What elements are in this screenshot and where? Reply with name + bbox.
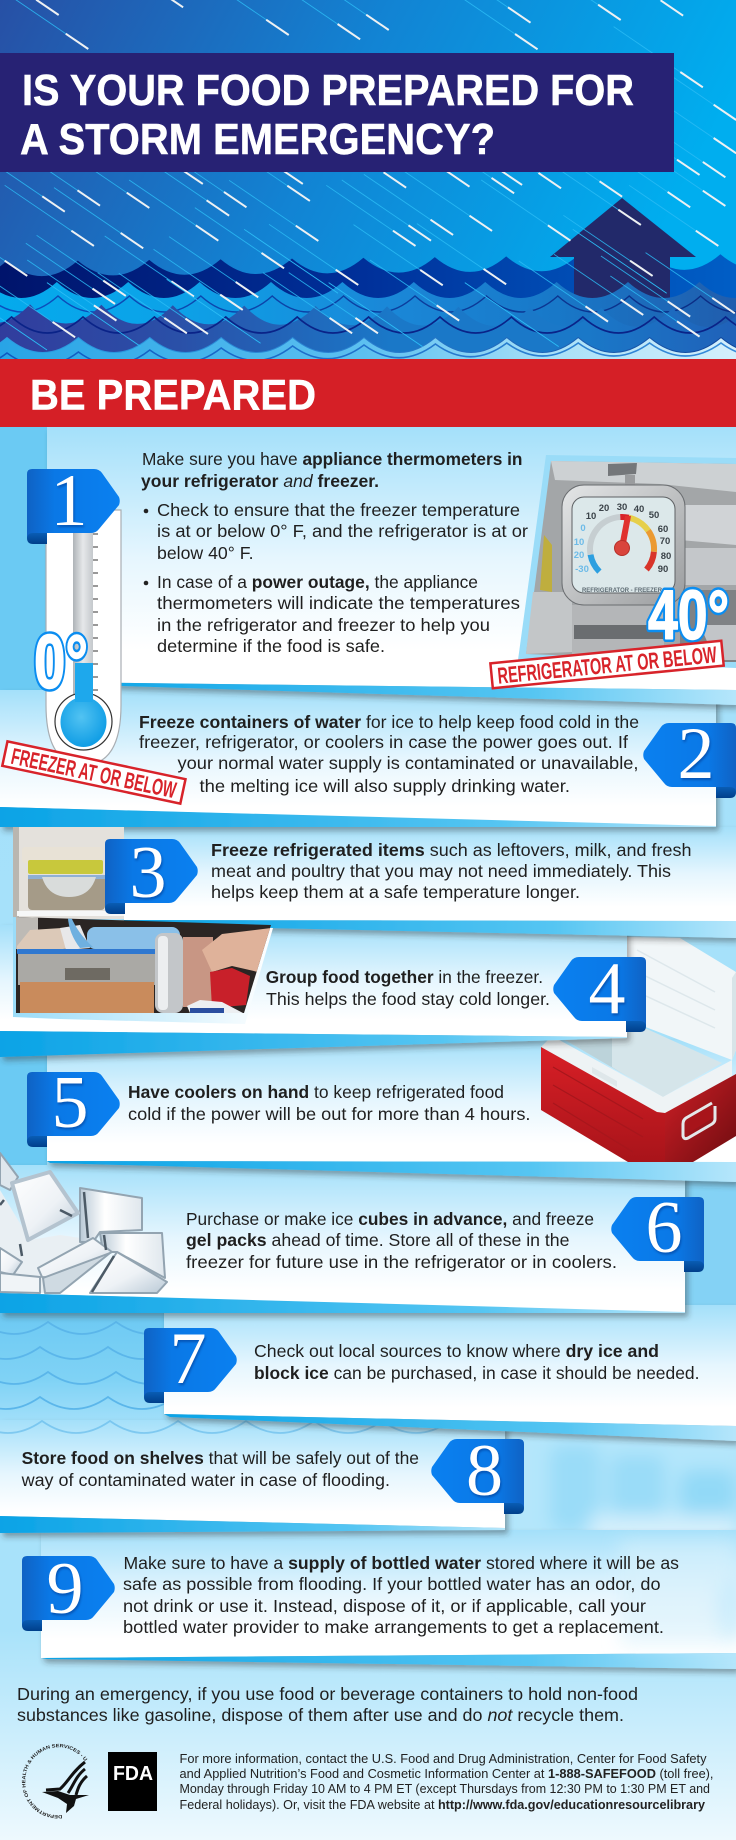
badge 9: 9 [46, 1548, 84, 1630]
lower left background strip [0, 1040, 47, 1170]
photo: ice cubes [0, 1153, 167, 1293]
panel: step 6 [0, 1165, 685, 1313]
upper freezer shelf [13, 827, 124, 919]
header storm scene [0, 0, 736, 380]
zero degrees label: 0° [34, 620, 88, 705]
panel 6 background [0, 1165, 685, 1313]
dial numbers: 0 [580, 523, 586, 534]
badge 3: 3 [130, 832, 166, 914]
step 8 text [21, 1448, 419, 1490]
dial numbers: 20 [574, 550, 584, 561]
dial numbers: 40 [634, 504, 644, 515]
dial numbers: 20 [599, 503, 609, 514]
first bullet: below 40° F. [157, 543, 254, 563]
cooler handle [690, 1105, 713, 1132]
second bullet [144, 572, 520, 656]
step 4 text: This helps the food stay cold longer. [266, 989, 550, 1009]
dark wave outline row [0, 317, 736, 333]
panel 5 background [47, 1040, 736, 1182]
contact information: and Applied Nutrition’s Food and Cosmetic Information Center at 1-888-SAFEFOOD (toll free), [180, 1766, 714, 1781]
panel 9 background [41, 1530, 736, 1669]
photo frame [518, 455, 736, 668]
second bullet: in the refrigerator and freezer to help you [157, 615, 490, 635]
badge 1: 1 [50, 460, 88, 542]
title text: IS YOUR FOOD PREPARED FOR [22, 66, 634, 115]
panel: step 7 [164, 1305, 736, 1441]
dial needle [619, 516, 631, 549]
step 5 text [128, 1082, 530, 1124]
blurred bottled water photo [505, 1425, 736, 1660]
title banner [0, 53, 674, 172]
badge 5: 5 [52, 1062, 88, 1144]
step 8 text: way of contaminated water in case of flooding. [21, 1470, 390, 1490]
panel: step 3 [124, 827, 736, 938]
red section banner [0, 359, 736, 427]
back wave row [0, 254, 736, 359]
panel 4 background [0, 925, 627, 1057]
badge 6 [611, 1187, 704, 1272]
step 5 text: Have coolers on hand to keep refrigerated food [128, 1082, 504, 1102]
water wave lines [0, 1322, 450, 1433]
bottle overlay [620, 1540, 736, 1645]
emergency note: substances like gasoline, dispose of them after use and do not recycle them. [17, 1705, 624, 1725]
second bullet: determine if the food is safe. [157, 636, 385, 656]
panel 8 background [0, 1420, 505, 1533]
badge 2 [643, 713, 736, 798]
first bullet: is at or below 0° F, and the refrigerator is at or [157, 521, 528, 541]
step 2 text: your normal water supply is contaminated or unavailable, [178, 753, 638, 773]
rain streaks [0, 0, 736, 350]
dial numbers: 90 [658, 564, 668, 575]
stamp: freezer at or below [2, 741, 186, 805]
contact information [180, 1751, 714, 1812]
step 1 intro text: your refrigerator and freezer. [141, 471, 379, 491]
step 4 text [266, 967, 550, 1009]
panel: step 8 [0, 1420, 505, 1533]
wave water background [0, 1310, 170, 1425]
step 7 text [254, 1341, 700, 1383]
dial numbers [574, 502, 671, 594]
contact information: Federal holidays). Or, visit the FDA website at http://www.fda.gov/educationresourcelibrary [180, 1797, 706, 1812]
cooler rim [541, 1036, 732, 1113]
dial numbers: 70 [660, 536, 670, 547]
step 2 text [139, 712, 639, 796]
thermometer tube [73, 530, 93, 698]
second bullet: thermometers will indicate the temperatures [157, 593, 520, 613]
panel 2 background [0, 690, 716, 827]
badge 2: 2 [678, 713, 714, 795]
front wave outline [0, 343, 736, 367]
illustration: red cooler [541, 937, 736, 1162]
step 3 text: Freeze refrigerated items such as leftovers, milk, and fresh [211, 840, 692, 860]
step 3 text: meat and poultry that you may not need immediately. This [211, 861, 671, 881]
dial numbers: 30 [617, 502, 627, 513]
badge 7 [144, 1318, 237, 1403]
logo: FDA [108, 1752, 157, 1811]
badge 3 [105, 832, 198, 914]
second wave row [0, 282, 736, 359]
emergency note: During an emergency, if you use food or beverage containers to hold non-food [17, 1684, 638, 1704]
logo: HHS seal: DEPARTMENT OF HEALTH & HUMAN SERVICES - USA [22, 1744, 88, 1818]
icon: flooded house arrow [550, 198, 696, 305]
dial scale arcs [590, 517, 654, 572]
dial numbers: -30 [575, 564, 589, 575]
dial numbers: 10 [574, 537, 584, 548]
badge 7: 7 [170, 1318, 206, 1400]
badge 4 [553, 948, 646, 1032]
dial numbers: 80 [661, 551, 671, 562]
step 6 text: freezer for future use in the refrigerator or in coolers. [186, 1252, 617, 1272]
cooler interior [560, 1020, 722, 1097]
step 9 text: bottled water provider to make arrangements to get a replacement. [123, 1617, 664, 1637]
logo: HHS seal [22, 1744, 89, 1818]
zero degrees label: 0° [34, 620, 88, 705]
second bullet: In case of a power outage, the appliance [157, 572, 478, 592]
badge 5 [27, 1062, 120, 1147]
front wave row [0, 338, 736, 380]
section page background [0, 427, 736, 1840]
step 2 text: Freeze containers of water for ice to help keep food cold in the [139, 712, 639, 732]
cooler lid [627, 937, 736, 1060]
step 9 text: not drink or use it. Instead, dispose of it, or if applicable, call your [123, 1596, 646, 1616]
step 7 text: block ice can be purchased, in case it should be needed. [254, 1363, 700, 1383]
stamp: freezer at or below: FREEZER AT OR BELOW [9, 743, 179, 803]
step 2 text: the melting ice will also supply drinking water. [200, 776, 570, 796]
badge 6: 6 [646, 1187, 682, 1269]
lower freezer compartment [13, 908, 273, 1024]
step 6 text [186, 1209, 617, 1272]
dial body [562, 485, 685, 605]
badge 8: 8 [466, 1430, 503, 1512]
panel 1 background [47, 427, 736, 705]
dial numbers: REFRIGERATOR - FREEZER [582, 588, 663, 594]
step 6 text: gel packs ahead of time. Store all of these in the [186, 1230, 570, 1250]
first bullet: Check to ensure that the freezer temperature [157, 500, 520, 520]
left background strip [0, 427, 47, 827]
red section banner: BE PREPARED [30, 372, 316, 420]
contact information: Monday through Friday 10 AM to 4 PM ET (except Thursdays from 12:30 PM to 1:30 PM ET and [180, 1781, 710, 1796]
title text: A STORM EMERGENCY? [20, 115, 495, 164]
sky background [0, 0, 736, 359]
step 5 text: cold if the power will be out for more than 4 hours. [128, 1104, 530, 1124]
step 2 text: freezer, refrigerator, or coolers in case the power goes out. If [139, 732, 628, 752]
step 9 text [123, 1553, 679, 1637]
thermometer bulb [55, 693, 112, 750]
step 3 text [211, 840, 692, 902]
thermometer body [46, 510, 121, 765]
step 8 text: Store food on shelves that will be safely out of the [22, 1448, 419, 1468]
logo: FDA: FDA [113, 1763, 153, 1785]
photo: refrigerator thermometer [518, 455, 736, 668]
emergency note [17, 1684, 638, 1725]
third wave row [0, 304, 736, 380]
badge 8 [431, 1430, 524, 1514]
step 1 intro text [141, 449, 522, 491]
panel: step 1 [47, 427, 736, 705]
badge 1 [27, 460, 120, 544]
badge 4: 4 [588, 948, 626, 1030]
mount hook and stand [625, 475, 635, 487]
panel: step 2 [0, 690, 716, 827]
step 3 text: helps keep them at a safe temperature longer. [211, 882, 580, 902]
step 1 intro text: Make sure you have appliance thermometers in [142, 449, 522, 469]
illustration: freezer thermometer [34, 510, 121, 765]
wave outline row [0, 296, 736, 312]
dial numbers: 60 [658, 524, 668, 535]
photo: freezer contents [13, 827, 273, 1024]
step 7 text: Check out local sources to know where dry ice and [254, 1341, 659, 1361]
title text [20, 66, 634, 164]
fridge shelves [551, 461, 736, 492]
panel: step 5 [47, 1040, 736, 1182]
right background strip [685, 1170, 736, 1330]
panel 3 background [124, 827, 736, 938]
first bullet [144, 500, 528, 563]
step 9 text: Make sure to have a supply of bottled water stored where it will be as [124, 1553, 679, 1573]
step 4 text: Group food together in the freezer. [266, 967, 543, 987]
panel: step 9 [41, 1530, 736, 1669]
badge 9 [22, 1548, 115, 1631]
panel: step 4 [0, 925, 627, 1057]
dial numbers: 10 [586, 511, 596, 522]
tick marks [93, 534, 98, 690]
dial numbers: 50 [649, 510, 659, 521]
step 6 text: Purchase or make ice cubes in advance, and freeze [186, 1209, 594, 1229]
step 9 text: safe as possible from flooding. If your bottled water has an odor, do [123, 1574, 660, 1594]
contact information: For more information, contact the U.S. Food and Drug Administration, Center for Food Safety [180, 1751, 707, 1766]
cooler red sides [541, 1047, 665, 1162]
panel 7 background [164, 1305, 736, 1441]
